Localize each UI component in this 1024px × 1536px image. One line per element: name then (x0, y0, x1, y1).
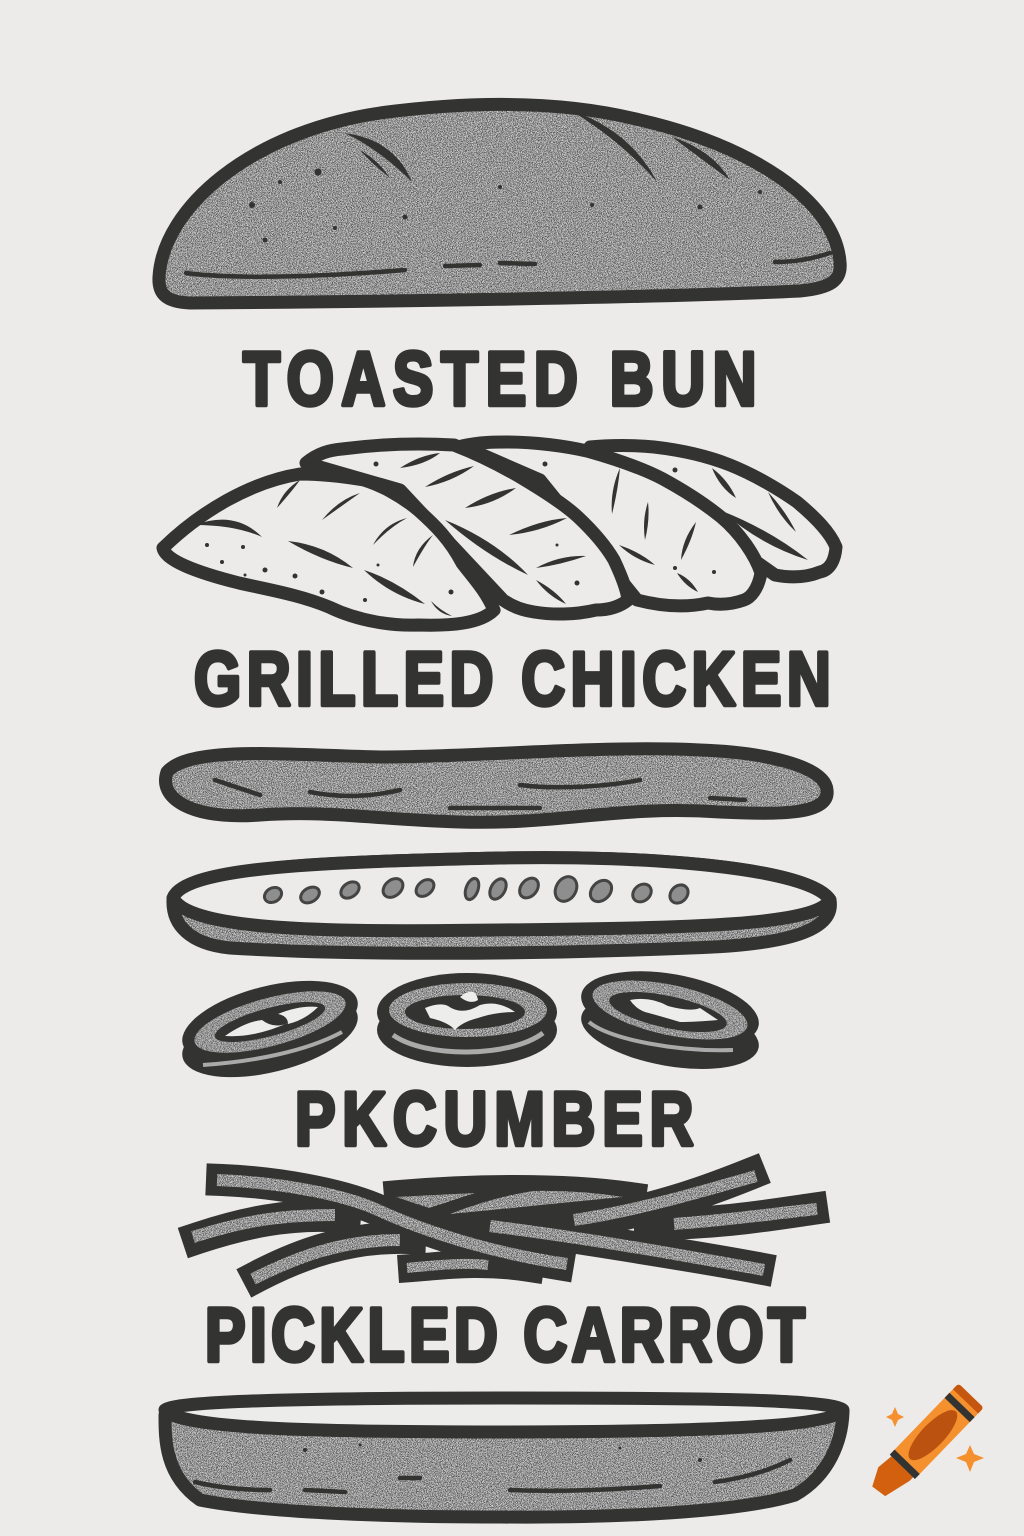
icon: sparkle small (886, 1407, 904, 1427)
chicken grill marks (195, 453, 808, 616)
seeds (262, 873, 692, 907)
grilled chicken (163, 442, 836, 625)
label: pkcumber: PKCUMBER (295, 1077, 693, 1162)
pickled carrot sticks (193, 1174, 817, 1279)
top bun (159, 104, 840, 303)
spread layer (166, 749, 827, 822)
bottom bun (165, 1398, 843, 1517)
chicken slice 4 (590, 446, 836, 577)
label: pickled carrot: PICKLED CARROT (205, 1293, 805, 1378)
label: grilled chicken: GRILLED CHICKEN (194, 637, 831, 722)
label: toasted bun: TOASTED BUN (243, 337, 757, 422)
pickle slice 3 (575, 959, 765, 1081)
icon: crayon (865, 1383, 984, 1504)
pickle slice 1 (174, 965, 366, 1093)
chicken specks (205, 462, 716, 602)
chicken slice 1 (163, 474, 494, 625)
cucumber strip with seeds (173, 858, 830, 953)
pickle slice 2 (377, 973, 557, 1067)
chicken slice 3 (462, 442, 761, 606)
chicken slice 2 (306, 444, 628, 614)
carrot dark silhouette (198, 1174, 812, 1276)
carrot gray centres (193, 1176, 817, 1279)
icon: sparkle large (956, 1445, 984, 1472)
